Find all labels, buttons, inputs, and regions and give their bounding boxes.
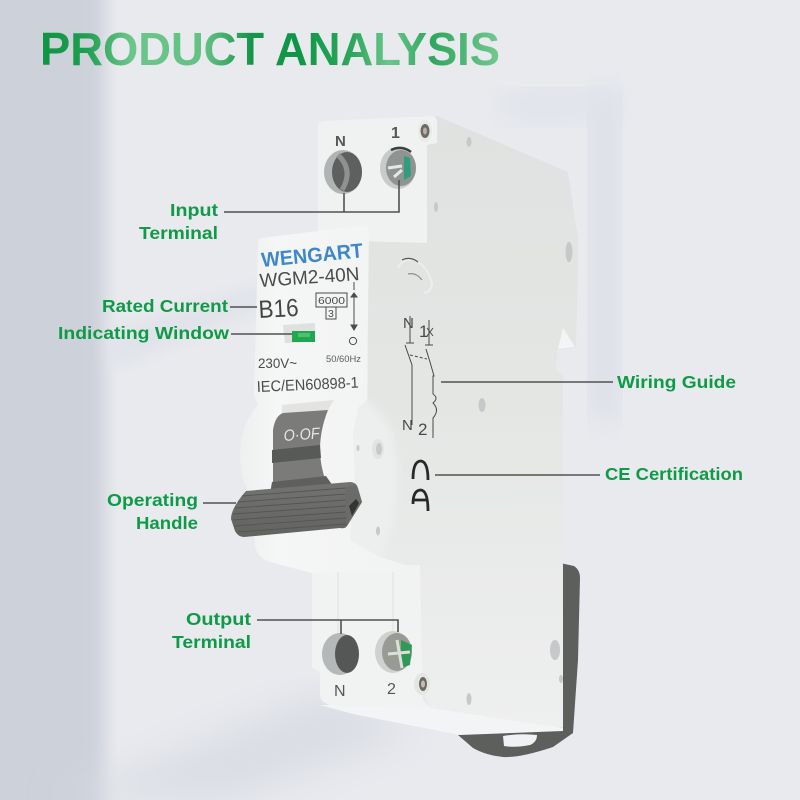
operating handle lever <box>231 482 362 537</box>
callout: wiring guide: Wiring Guide <box>617 372 736 392</box>
brand logo: WENGART <box>260 239 364 272</box>
voltage: 230V~ <box>258 355 297 371</box>
breaking capacity box: 3 <box>328 308 334 320</box>
wiring diagram <box>405 316 436 438</box>
handle window and toggle <box>270 400 334 494</box>
side face <box>366 116 578 728</box>
lower terminal screw <box>375 631 412 673</box>
wiring labels: N <box>403 315 414 332</box>
upper terminal front <box>318 116 437 243</box>
circuit breaker device: 1 <box>391 125 400 142</box>
standard: IEC/EN60898-1 <box>256 375 359 396</box>
DIN clip <box>458 563 580 757</box>
rating B16: B16 <box>258 294 299 324</box>
callout: operating handle <box>107 490 236 533</box>
CE mark <box>413 461 428 511</box>
side notch <box>558 328 575 349</box>
frequency: 50/60Hz <box>326 354 362 364</box>
upper terminal N hole <box>324 150 362 194</box>
embossed side mark <box>398 258 432 293</box>
callout: input terminal: Input <box>170 200 218 220</box>
lower terminal front <box>312 565 430 708</box>
circuit breaker device: 2 <box>387 681 396 698</box>
callout: rated current: Rated Current <box>102 296 228 316</box>
side boss near rivet <box>345 402 398 560</box>
lower corner screw <box>414 673 430 695</box>
callout: output terminal: Output <box>186 609 251 629</box>
breaking capacity box: 6000 <box>318 295 345 307</box>
callout: input terminal <box>139 180 399 243</box>
title: PRODUCT ANALYSIS <box>40 23 500 75</box>
underside <box>320 705 563 735</box>
indicating window <box>283 323 315 343</box>
on-off arrow <box>349 282 357 345</box>
lower terminal N hole <box>322 633 359 675</box>
upper terminal screw <box>380 147 416 189</box>
rivets <box>356 137 572 705</box>
circuit breaker device: N <box>402 417 413 434</box>
lower terminal labels: N <box>334 683 346 700</box>
callout: indicating window: Indicating Window <box>58 323 229 343</box>
callout: operating handle: Handle <box>136 513 198 533</box>
model: WGM2-40N <box>259 264 360 292</box>
breaking capacity box <box>316 293 347 320</box>
callout: output terminal: Terminal <box>172 632 251 652</box>
upper terminal labels: N <box>335 133 346 150</box>
callout: output terminal <box>172 609 398 652</box>
callout: input terminal: Terminal <box>139 223 218 243</box>
circuit breaker device: 2 <box>418 420 427 439</box>
O-OFF text: O·OF <box>283 425 321 445</box>
front cover <box>240 225 420 573</box>
upper corner screw <box>418 120 432 142</box>
circuit breaker device <box>231 116 580 757</box>
circuit breaker device: 1 <box>419 322 428 341</box>
callout: CE certification: CE Certification <box>605 464 743 484</box>
callout: operating handle: Operating <box>107 490 198 510</box>
